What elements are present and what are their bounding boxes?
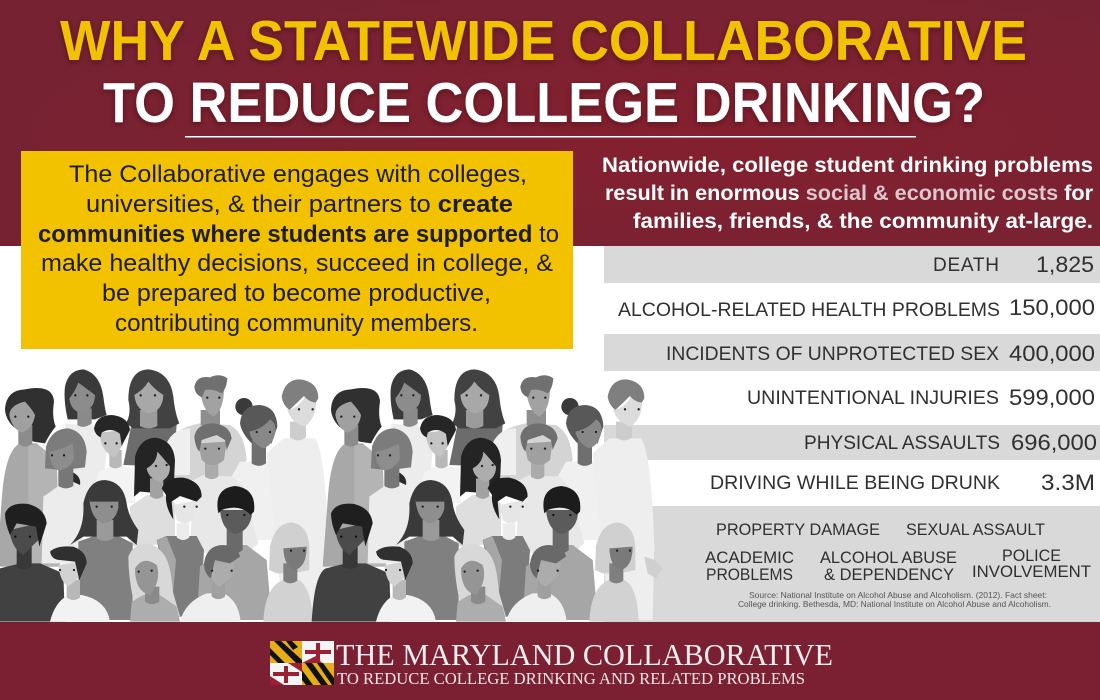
row: assaults (804, 430, 1097, 455)
row: assaults: 696,000 (1011, 430, 1097, 455)
text block: nationwide costs (602, 154, 1093, 233)
callout: yellow mission box (21, 151, 573, 349)
row: drunk driving (710, 470, 1095, 495)
white body background (0, 246, 1100, 622)
row: health problems: 150,000 (1009, 295, 1095, 320)
panel: other consequences: ALCOHOL ABUSE (820, 548, 957, 567)
panel: other consequences: PROPERTY DAMAGE (716, 520, 880, 539)
title: WHY A STATEWIDE COLLABORATIVE (60, 9, 1027, 73)
panel: other consequences: INVOLVEMENT (972, 562, 1091, 581)
panel: other consequences: SEXUAL ASSAULT (906, 520, 1045, 539)
panel: other consequences: PROBLEMS (706, 565, 793, 584)
text block: nationwide costs: families, friends, & the community at-large. (633, 210, 1093, 233)
footer bar (0, 622, 1100, 700)
source note: College drinking. Bethesda, MD: National Institute on Alcohol Abuse and Alcoholism. (738, 599, 1051, 609)
row: health problems (618, 295, 1095, 321)
source note (738, 590, 1051, 609)
callout: yellow mission box: contributing community members. (115, 310, 478, 337)
icon: Maryland flag (270, 641, 334, 685)
row: injuries: 599,000 (1009, 385, 1095, 410)
row: injuries (747, 385, 1095, 410)
panel: other consequences (705, 520, 1091, 584)
illustration: crowd of students (0, 369, 663, 622)
header background (0, 0, 1100, 246)
panel: other consequences: ACADEMIC (705, 548, 794, 567)
text block: nationwide costs: Nationwide, college student drinking problems (602, 154, 1093, 177)
row: injuries: UNINTENTIONAL INJURIES (747, 388, 999, 409)
callout: yellow mission box: be prepared to become productive, (102, 280, 491, 307)
row: death (933, 252, 1094, 277)
logo wordmark: THE MARYLAND COLLABORATIVE (336, 637, 833, 672)
panel: other consequences: & DEPENDENCY (824, 565, 954, 584)
title: TO REDUCE COLLEGE DRINKING? (103, 71, 985, 135)
logo wordmark: TO REDUCE COLLEGE DRINKING AND RELATED PROBLEMS (337, 669, 805, 688)
text block: nationwide costs: result in enormous social & economic costs for (605, 182, 1093, 205)
row: health problems: ALCOHOL-RELATED HEALTH PROBLEMS (618, 300, 1000, 321)
row: unprotected sex: INCIDENTS OF UNPROTECTED SEX (666, 344, 999, 365)
source note: Source: National Institute on Alcohol Abuse and Alcoholism. (2012). Fact sheet: (749, 590, 1047, 600)
callout: yellow mission box: universities, & their partners to create (86, 191, 513, 218)
row: drunk driving: DRIVING WHILE BEING DRUNK (710, 473, 1000, 494)
row: unprotected sex (666, 341, 1095, 366)
callout: yellow mission box: The Collaborative engages with colleges, (69, 161, 527, 188)
logo wordmark (336, 637, 833, 688)
callout: yellow mission box: communities where students are supported to (38, 221, 559, 248)
row: assaults: PHYSICAL ASSAULTS (804, 433, 1000, 454)
callout: yellow mission box: make healthy decisions, succeed in college, & (41, 250, 553, 277)
row: death: 1,825 (1036, 252, 1094, 277)
panel: statistics table (604, 246, 1100, 622)
panel: other consequences: POLICE (1002, 546, 1061, 565)
title (60, 9, 1027, 135)
row: drunk driving: 3.3M (1041, 470, 1095, 495)
row: unprotected sex: 400,000 (1009, 341, 1095, 366)
row: death: DEATH (933, 255, 999, 276)
